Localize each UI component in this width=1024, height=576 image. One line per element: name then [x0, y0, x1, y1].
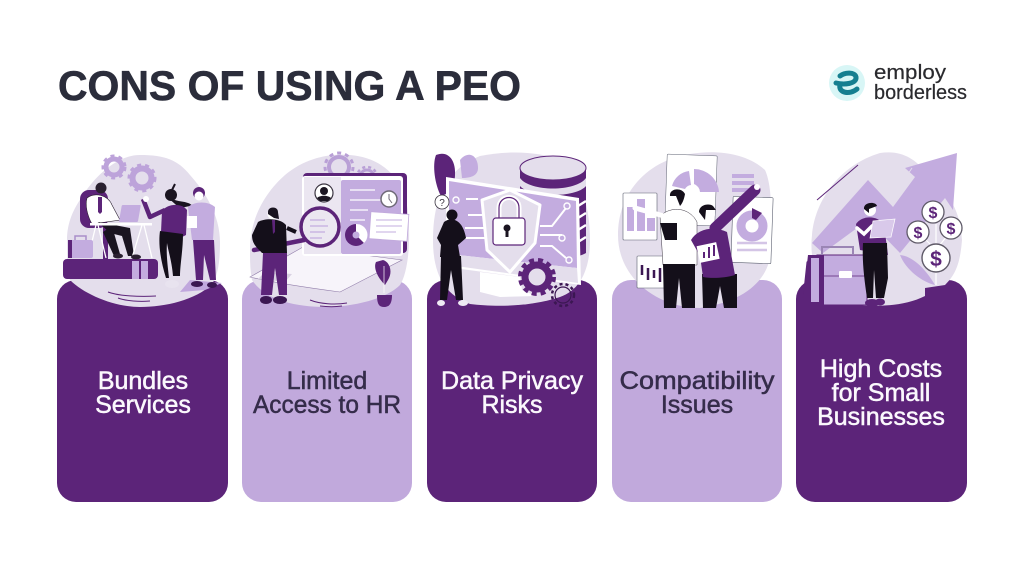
- panel: compatibility issues: [612, 152, 782, 502]
- illustration: rising costs: [803, 152, 962, 307]
- title: CONS OF USING A PEO: [58, 62, 521, 109]
- illustration: office team: [63, 155, 222, 307]
- label: data privacy risks: Data Privacy: [441, 367, 583, 395]
- illustration: rising costs: $: [929, 205, 938, 222]
- illustration: data security: [433, 153, 590, 306]
- panel: data privacy risks: [427, 153, 597, 502]
- panel: limited access to HR: [242, 153, 412, 502]
- panel: high costs for small businesses: [796, 152, 967, 502]
- label: high costs for small businesses: for Small: [832, 379, 930, 407]
- illustration: rising costs: $: [930, 248, 942, 271]
- illustration: analysts with charts: [618, 152, 773, 308]
- logo: employ borderless: borderless: [874, 82, 967, 104]
- illustration: data security: ?: [439, 198, 445, 209]
- label: bundles services: Bundles: [98, 367, 188, 395]
- illustration: rising costs: $: [947, 221, 956, 238]
- label: compatibility issues: Issues: [661, 391, 733, 419]
- label: data privacy risks: Risks: [481, 391, 543, 419]
- illustration: rising costs: $: [914, 225, 923, 242]
- label: limited access to HR: Access to HR: [253, 391, 401, 419]
- label: high costs for small businesses: Businesses: [817, 403, 945, 431]
- label: high costs for small businesses: High Costs: [820, 355, 942, 383]
- logo: employ borderless: [829, 62, 967, 104]
- label: bundles services: Services: [95, 391, 191, 419]
- label: compatibility issues: Compatibility: [620, 367, 775, 395]
- illustration: laptop and magnifier: [250, 153, 409, 307]
- panel: bundles services: [57, 155, 228, 502]
- logo: employ borderless: employ: [874, 62, 946, 84]
- label: limited access to HR: Limited: [287, 367, 367, 395]
